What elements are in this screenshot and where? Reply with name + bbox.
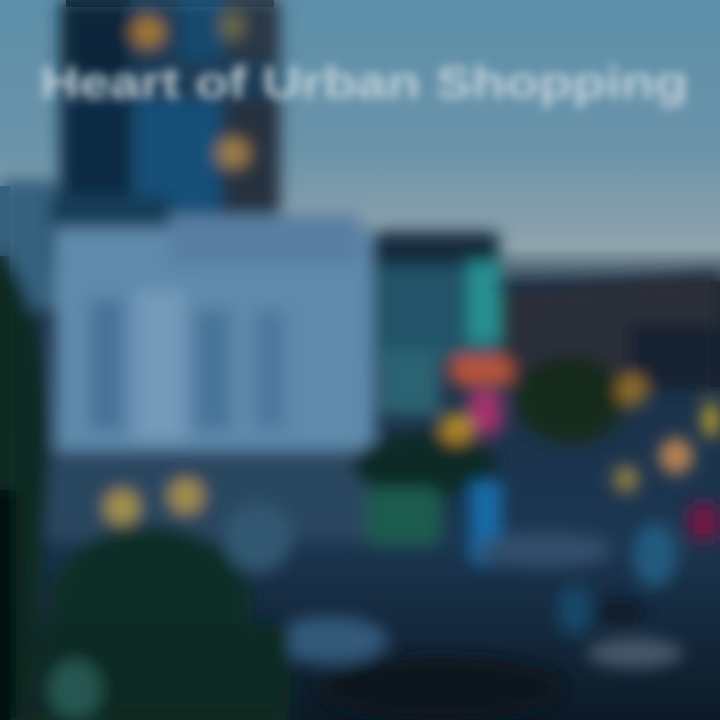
left distant building	[0, 180, 62, 310]
pale main building	[55, 215, 375, 450]
neon signs	[366, 356, 720, 564]
distant hills	[500, 272, 720, 390]
mid-tone ground-floor band	[45, 450, 375, 540]
tower windows	[132, 12, 249, 168]
pale cars and road highlights	[195, 504, 683, 695]
dark foliage, centre	[353, 356, 625, 499]
dark road foreground	[315, 656, 565, 720]
title: Heart of Urban Shopping	[40, 57, 688, 108]
dark tower	[50, 0, 280, 270]
foreground tree	[40, 525, 290, 720]
teal building	[372, 232, 500, 415]
string lights	[105, 374, 720, 524]
left foreground foliage	[0, 245, 50, 720]
